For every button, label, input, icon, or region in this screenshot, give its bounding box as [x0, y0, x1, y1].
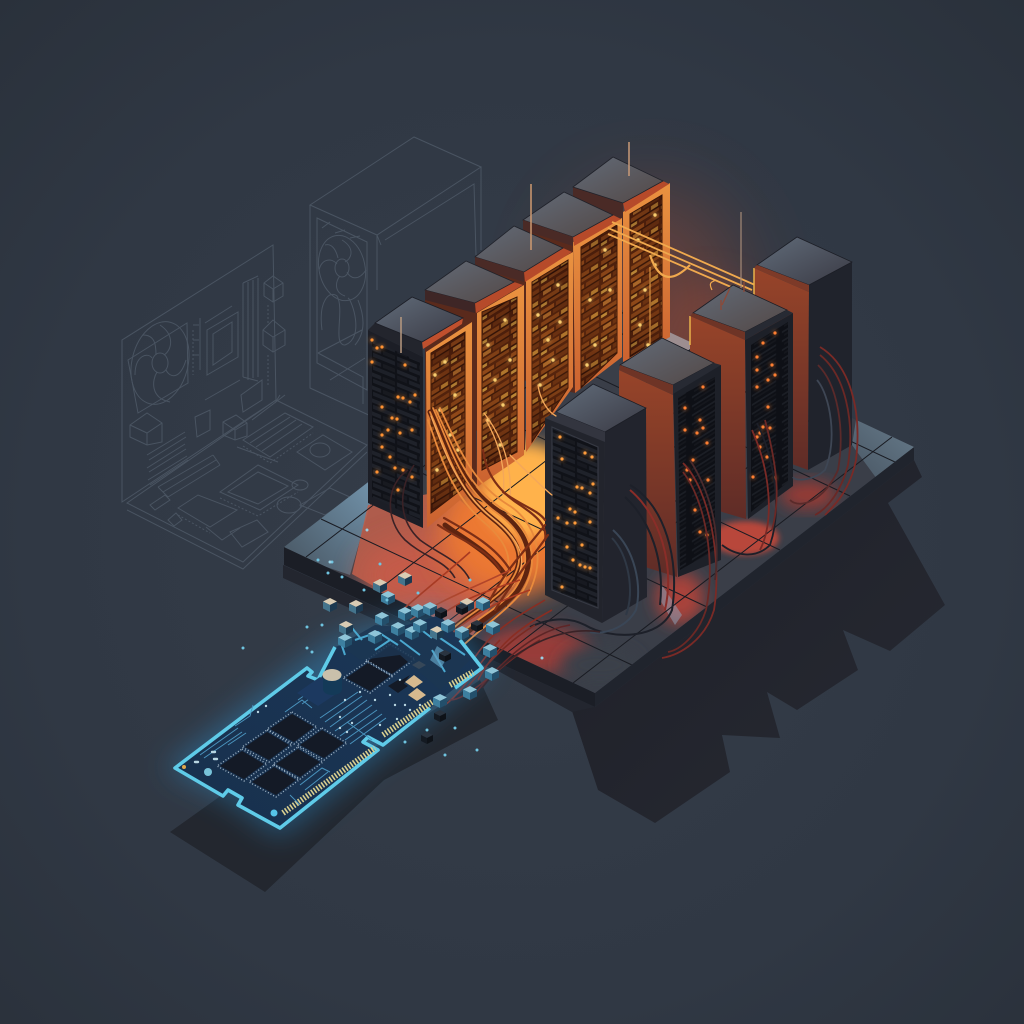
- circuit traces: [200, 683, 386, 805]
- cables: rack B: [662, 460, 717, 658]
- server rack 1 (back row, dark face): [368, 297, 472, 528]
- server rack D (back right): [754, 237, 852, 470]
- status LEDs: [372, 340, 415, 490]
- main orange cable bundle: [428, 385, 556, 650]
- platform cast shadow: [283, 460, 945, 823]
- bright indicator lights on orange panels: [435, 215, 655, 470]
- cables: rack A: [530, 485, 674, 635]
- memory module circuit board: [165, 605, 492, 838]
- chip drop shadow: [170, 680, 498, 892]
- platform base: [284, 301, 930, 707]
- dark red wires toward memory module: [390, 465, 600, 705]
- floor tile lines: [306, 311, 895, 683]
- capacitor and gold components: [322, 661, 426, 701]
- small floating particles: [243, 560, 477, 755]
- server rack B (front middle): [619, 338, 721, 577]
- server rack 2 (back row): [425, 261, 524, 487]
- disintegrating board fragments: [340, 625, 470, 690]
- wireframe motherboard: [122, 245, 367, 569]
- server rack 3 (back row): [475, 184, 573, 452]
- server rack 4 (back row): [523, 192, 622, 393]
- server rack C (middle right): [690, 282, 793, 519]
- cables: rack D: [790, 347, 858, 515]
- flying debris cubes: [323, 572, 500, 744]
- cables: rack C: [722, 420, 777, 554]
- ambient orange glow behind racks: [560, 190, 765, 410]
- server rack A (front): [545, 384, 647, 623]
- gold edge contacts: [283, 672, 473, 813]
- faint floor sparkles: [330, 530, 542, 658]
- wireframe PC case: [310, 137, 481, 417]
- server rack 5 (back row): [573, 142, 670, 362]
- overhead yellow cables: [608, 212, 755, 360]
- bright traces and pads: [195, 680, 420, 762]
- memory chips: [217, 644, 415, 797]
- floor lighting: [284, 310, 930, 685]
